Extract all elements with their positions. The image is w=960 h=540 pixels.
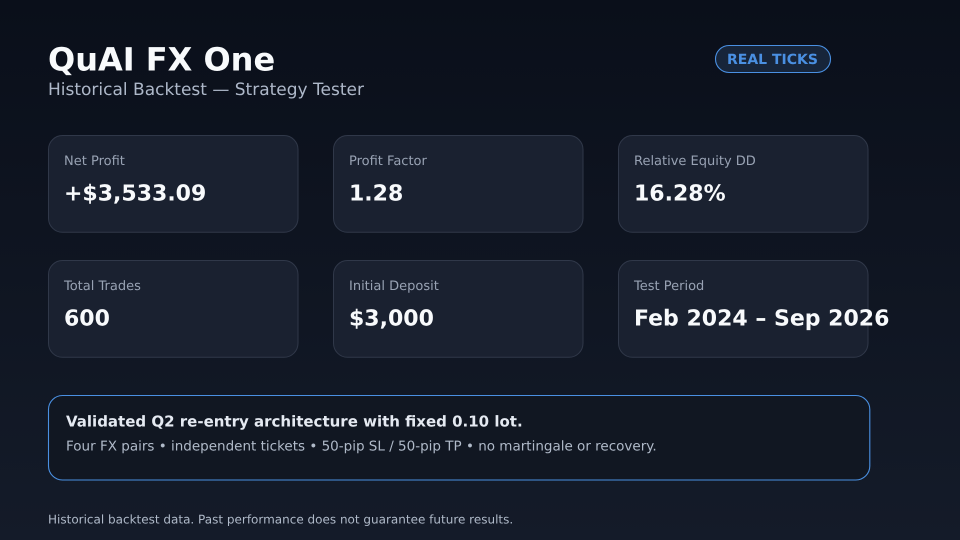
card: test period: Feb 2024 – Sep 2026	[634, 306, 889, 332]
card: net profit	[48, 136, 298, 232]
card: initial deposit: $3,000	[349, 306, 434, 332]
card: relative equity drawdown	[618, 136, 868, 232]
card: profit factor: Profit Factor	[349, 154, 427, 169]
badge: real ticks: REAL TICKS	[727, 52, 818, 68]
footer disclaimer: Historical backtest data. Past performance does not guarantee future results.	[48, 512, 513, 526]
card: test period	[618, 260, 889, 357]
card: test period: Test Period	[633, 279, 704, 294]
card: relative equity drawdown: Relative Equity DD	[634, 154, 756, 169]
card: initial deposit	[334, 260, 583, 357]
card: profit factor: 1.28	[349, 182, 403, 206]
card: net profit: +$3,533.09	[64, 182, 206, 206]
subtitle: Historical Backtest — Strategy Tester	[48, 80, 364, 100]
callout: validated architecture	[48, 396, 870, 480]
card: total trades	[48, 260, 298, 357]
title: QuAI FX One	[48, 40, 275, 78]
card: profit factor	[334, 136, 583, 232]
card: initial deposit: Initial Deposit	[349, 279, 439, 294]
card: net profit: Net Profit	[64, 154, 125, 169]
card: total trades: Total Trades	[63, 279, 141, 294]
card: relative equity drawdown: 16.28%	[634, 182, 726, 206]
callout: validated architecture: Four FX pairs • independent tickets • 50-pip SL / 50-pip TP • no martingale or recovery.	[66, 438, 657, 454]
card: total trades: 600	[64, 306, 110, 332]
badge: real ticks	[716, 46, 830, 72]
callout: validated architecture: Validated Q2 re-entry architecture with fixed 0.10 lot.	[66, 412, 523, 430]
